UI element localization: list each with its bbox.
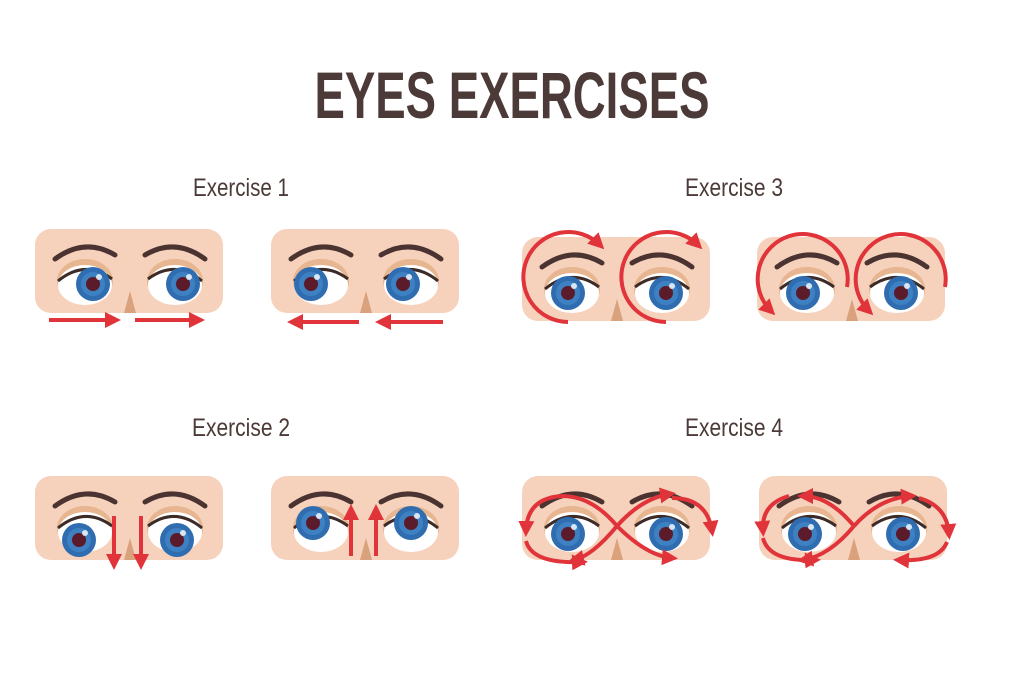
heading: Exercise 3: Exercise 3 xyxy=(685,174,783,202)
arrows up xyxy=(351,510,376,556)
arrows left xyxy=(293,320,443,324)
panel: exercise 1 look left xyxy=(271,229,459,322)
circle arrows xyxy=(758,234,946,311)
heading: Exercise 1: Exercise 1 xyxy=(193,174,289,202)
panel: exercise 1 look right xyxy=(35,229,223,320)
panel: exercise 3 circles clockwise xyxy=(522,232,710,322)
panel: exercise 3 circles counter xyxy=(757,234,946,321)
heading: Exercise 4: Exercise 4 xyxy=(685,414,783,442)
infinity arrows xyxy=(526,494,712,562)
panel: exercise 2 look down xyxy=(35,476,223,564)
panel: exercise 2 look up xyxy=(271,476,459,560)
infinity arrows xyxy=(763,496,949,560)
heading: Exercise 2: Exercise 2 xyxy=(192,414,290,442)
arrows right xyxy=(49,318,199,322)
circle arrows xyxy=(523,232,698,322)
arrows down xyxy=(114,516,141,564)
title: EYES EXERCISES xyxy=(314,58,710,132)
panel: exercise 4 figure eight xyxy=(522,476,712,562)
panel: exercise 4 figure eight reverse xyxy=(759,476,949,560)
